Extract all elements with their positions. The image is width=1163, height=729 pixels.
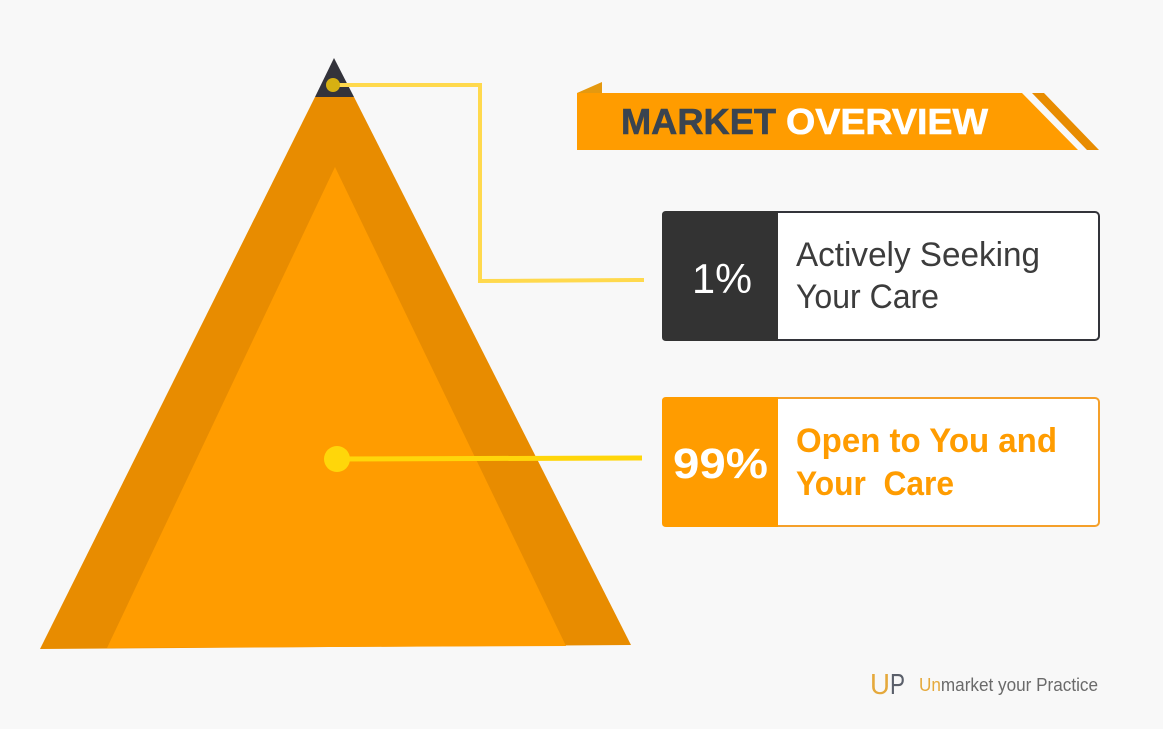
percentage: 99% <box>673 440 768 488</box>
pyramid inner layer: 99% <box>107 167 566 648</box>
pyramid chart <box>40 58 631 649</box>
logo mark <box>870 669 905 701</box>
banner flap <box>577 82 602 93</box>
logo mark: P <box>890 669 905 701</box>
banner heading: OVERVIEW <box>786 101 988 142</box>
connector: inner pyramid to 99% card <box>324 446 642 472</box>
card label: Your Care <box>796 278 939 316</box>
pyramid tip: 1% <box>315 58 354 97</box>
card label: Your Care <box>796 465 954 503</box>
card label <box>796 422 1057 503</box>
card: 1% actively seeking <box>662 211 1099 341</box>
banner heading: MARKET <box>621 101 776 142</box>
logo wordmark: Unmarket your Practice <box>919 675 1098 695</box>
percentage: 1% <box>692 255 752 302</box>
logo <box>870 669 1098 701</box>
banner body <box>577 93 1078 150</box>
logo mark: U <box>870 669 890 701</box>
card label: Open to You and <box>796 422 1057 460</box>
connector: tip to 1% card <box>326 78 644 281</box>
banner stripe <box>1032 93 1099 150</box>
banner heading <box>621 101 988 142</box>
title banner <box>577 82 1099 150</box>
card label <box>796 236 1040 316</box>
card: 99% open to you <box>662 397 1099 527</box>
card label: Actively Seeking <box>796 236 1040 274</box>
pyramid outer layer <box>40 97 631 649</box>
